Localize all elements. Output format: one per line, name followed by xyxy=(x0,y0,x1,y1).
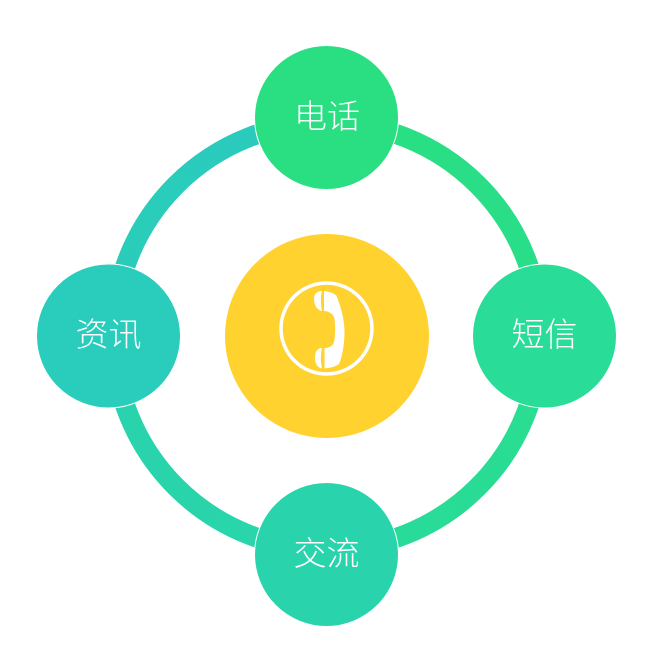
node: 电话 xyxy=(254,46,398,190)
node: 资讯: 资讯 xyxy=(76,316,142,353)
ring arc: top left xyxy=(114,122,327,336)
ring arc: top right xyxy=(327,122,540,336)
node: 短信: 短信 xyxy=(512,316,578,353)
icon: telephone handset xyxy=(281,283,372,374)
node: 交流: 交流 xyxy=(294,535,360,572)
node: 电话: 电话 xyxy=(294,98,360,135)
node: 资讯 xyxy=(36,264,180,408)
node: 交流 xyxy=(254,482,398,626)
node: 短信 xyxy=(472,264,616,408)
center circle xyxy=(225,234,429,438)
ring arc: bottom right xyxy=(327,336,540,550)
ring arc: bottom left xyxy=(114,336,327,550)
